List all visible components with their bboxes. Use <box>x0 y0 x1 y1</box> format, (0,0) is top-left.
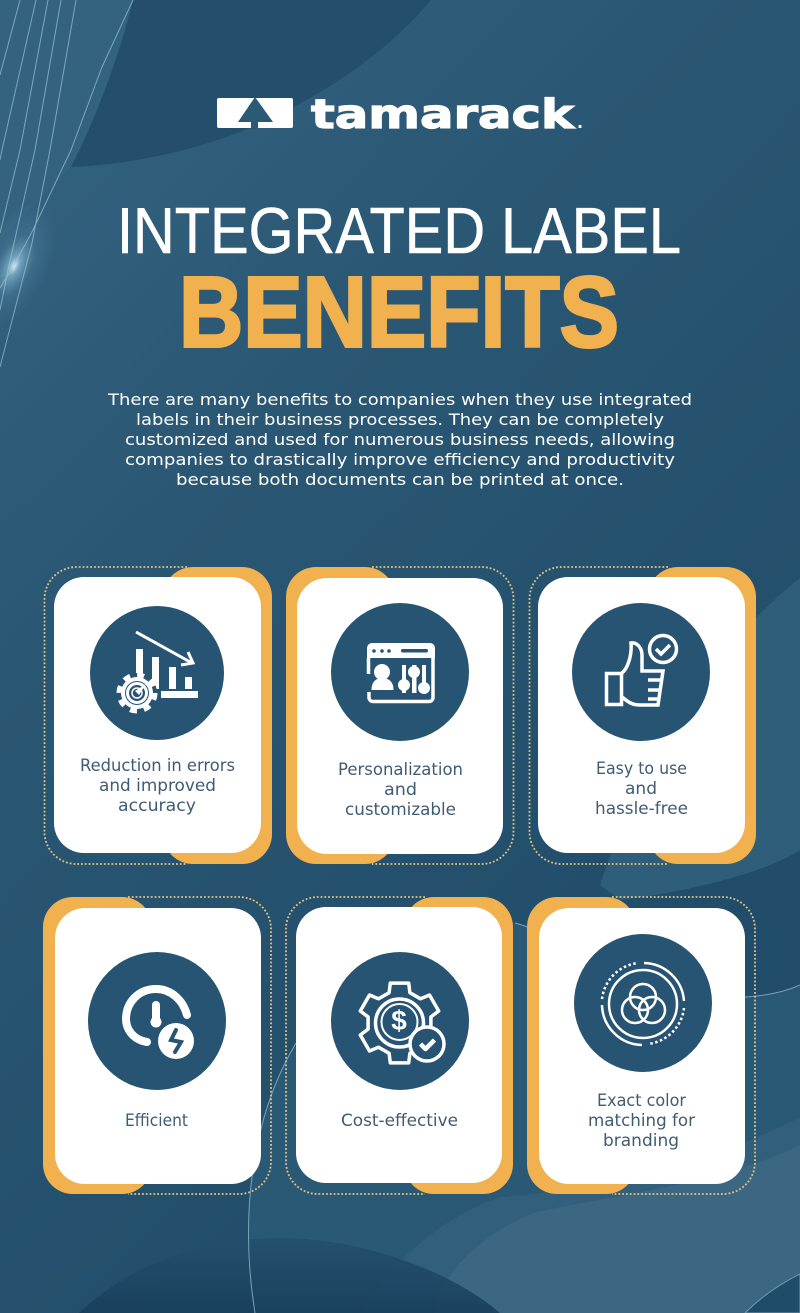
label <box>80 756 235 816</box>
icon: chart with gear <box>117 632 198 713</box>
intro paragraph: labels in their business processes. They can be completely <box>136 410 664 429</box>
intro paragraph: companies to drastically improve efficiency and productivity <box>125 450 675 469</box>
label: Reduction in errors <box>80 756 235 776</box>
label: customizable <box>345 800 456 820</box>
label: and <box>384 780 417 800</box>
label: Cost-effective <box>341 1111 458 1131</box>
logo wordmark: . <box>577 113 583 132</box>
title line 2: BENEFITS <box>179 256 619 368</box>
logo wordmark: tamarack <box>311 92 576 138</box>
label <box>588 1091 695 1151</box>
label: matching for <box>588 1111 695 1131</box>
label: Efficient <box>125 1111 188 1131</box>
label: Easy to use <box>596 759 687 779</box>
label: accuracy <box>118 796 196 816</box>
label <box>338 760 463 820</box>
icon: overlapping color circles <box>602 963 684 1045</box>
label: Exact color <box>597 1091 686 1111</box>
icon: gear with dollar and check <box>360 983 444 1063</box>
intro paragraph: customized and used for numerous business needs, allowing <box>125 430 675 449</box>
label: Personalization <box>338 760 463 780</box>
label: branding <box>603 1131 679 1151</box>
panel: easy to use <box>529 567 756 864</box>
panel: personalization <box>286 567 514 864</box>
intro paragraph: because both documents can be printed at once. <box>176 470 624 489</box>
label <box>595 759 688 819</box>
icon: browser window with sliders <box>367 643 435 702</box>
icon: gear with dollar and check: $ <box>391 1005 407 1036</box>
panel: cost-effective <box>286 897 513 1194</box>
logo: tamarack <box>217 92 583 138</box>
label: hassle-free <box>595 799 688 819</box>
intro paragraph <box>107 390 692 489</box>
icon: thumbs up with check <box>606 636 676 705</box>
icon: tamarack mark <box>217 97 293 129</box>
title <box>117 194 681 368</box>
panel: reduction in errors <box>44 567 272 864</box>
title line 1: INTEGRATED LABEL <box>117 194 681 267</box>
icon: gauge with lightning bolt <box>126 989 196 1061</box>
intro paragraph: There are many benefits to companies when they use integrated <box>107 390 692 409</box>
panel: efficient <box>43 897 271 1194</box>
panel: exact color matching <box>527 897 755 1194</box>
label: and <box>625 779 657 799</box>
label: and improved <box>99 776 216 796</box>
